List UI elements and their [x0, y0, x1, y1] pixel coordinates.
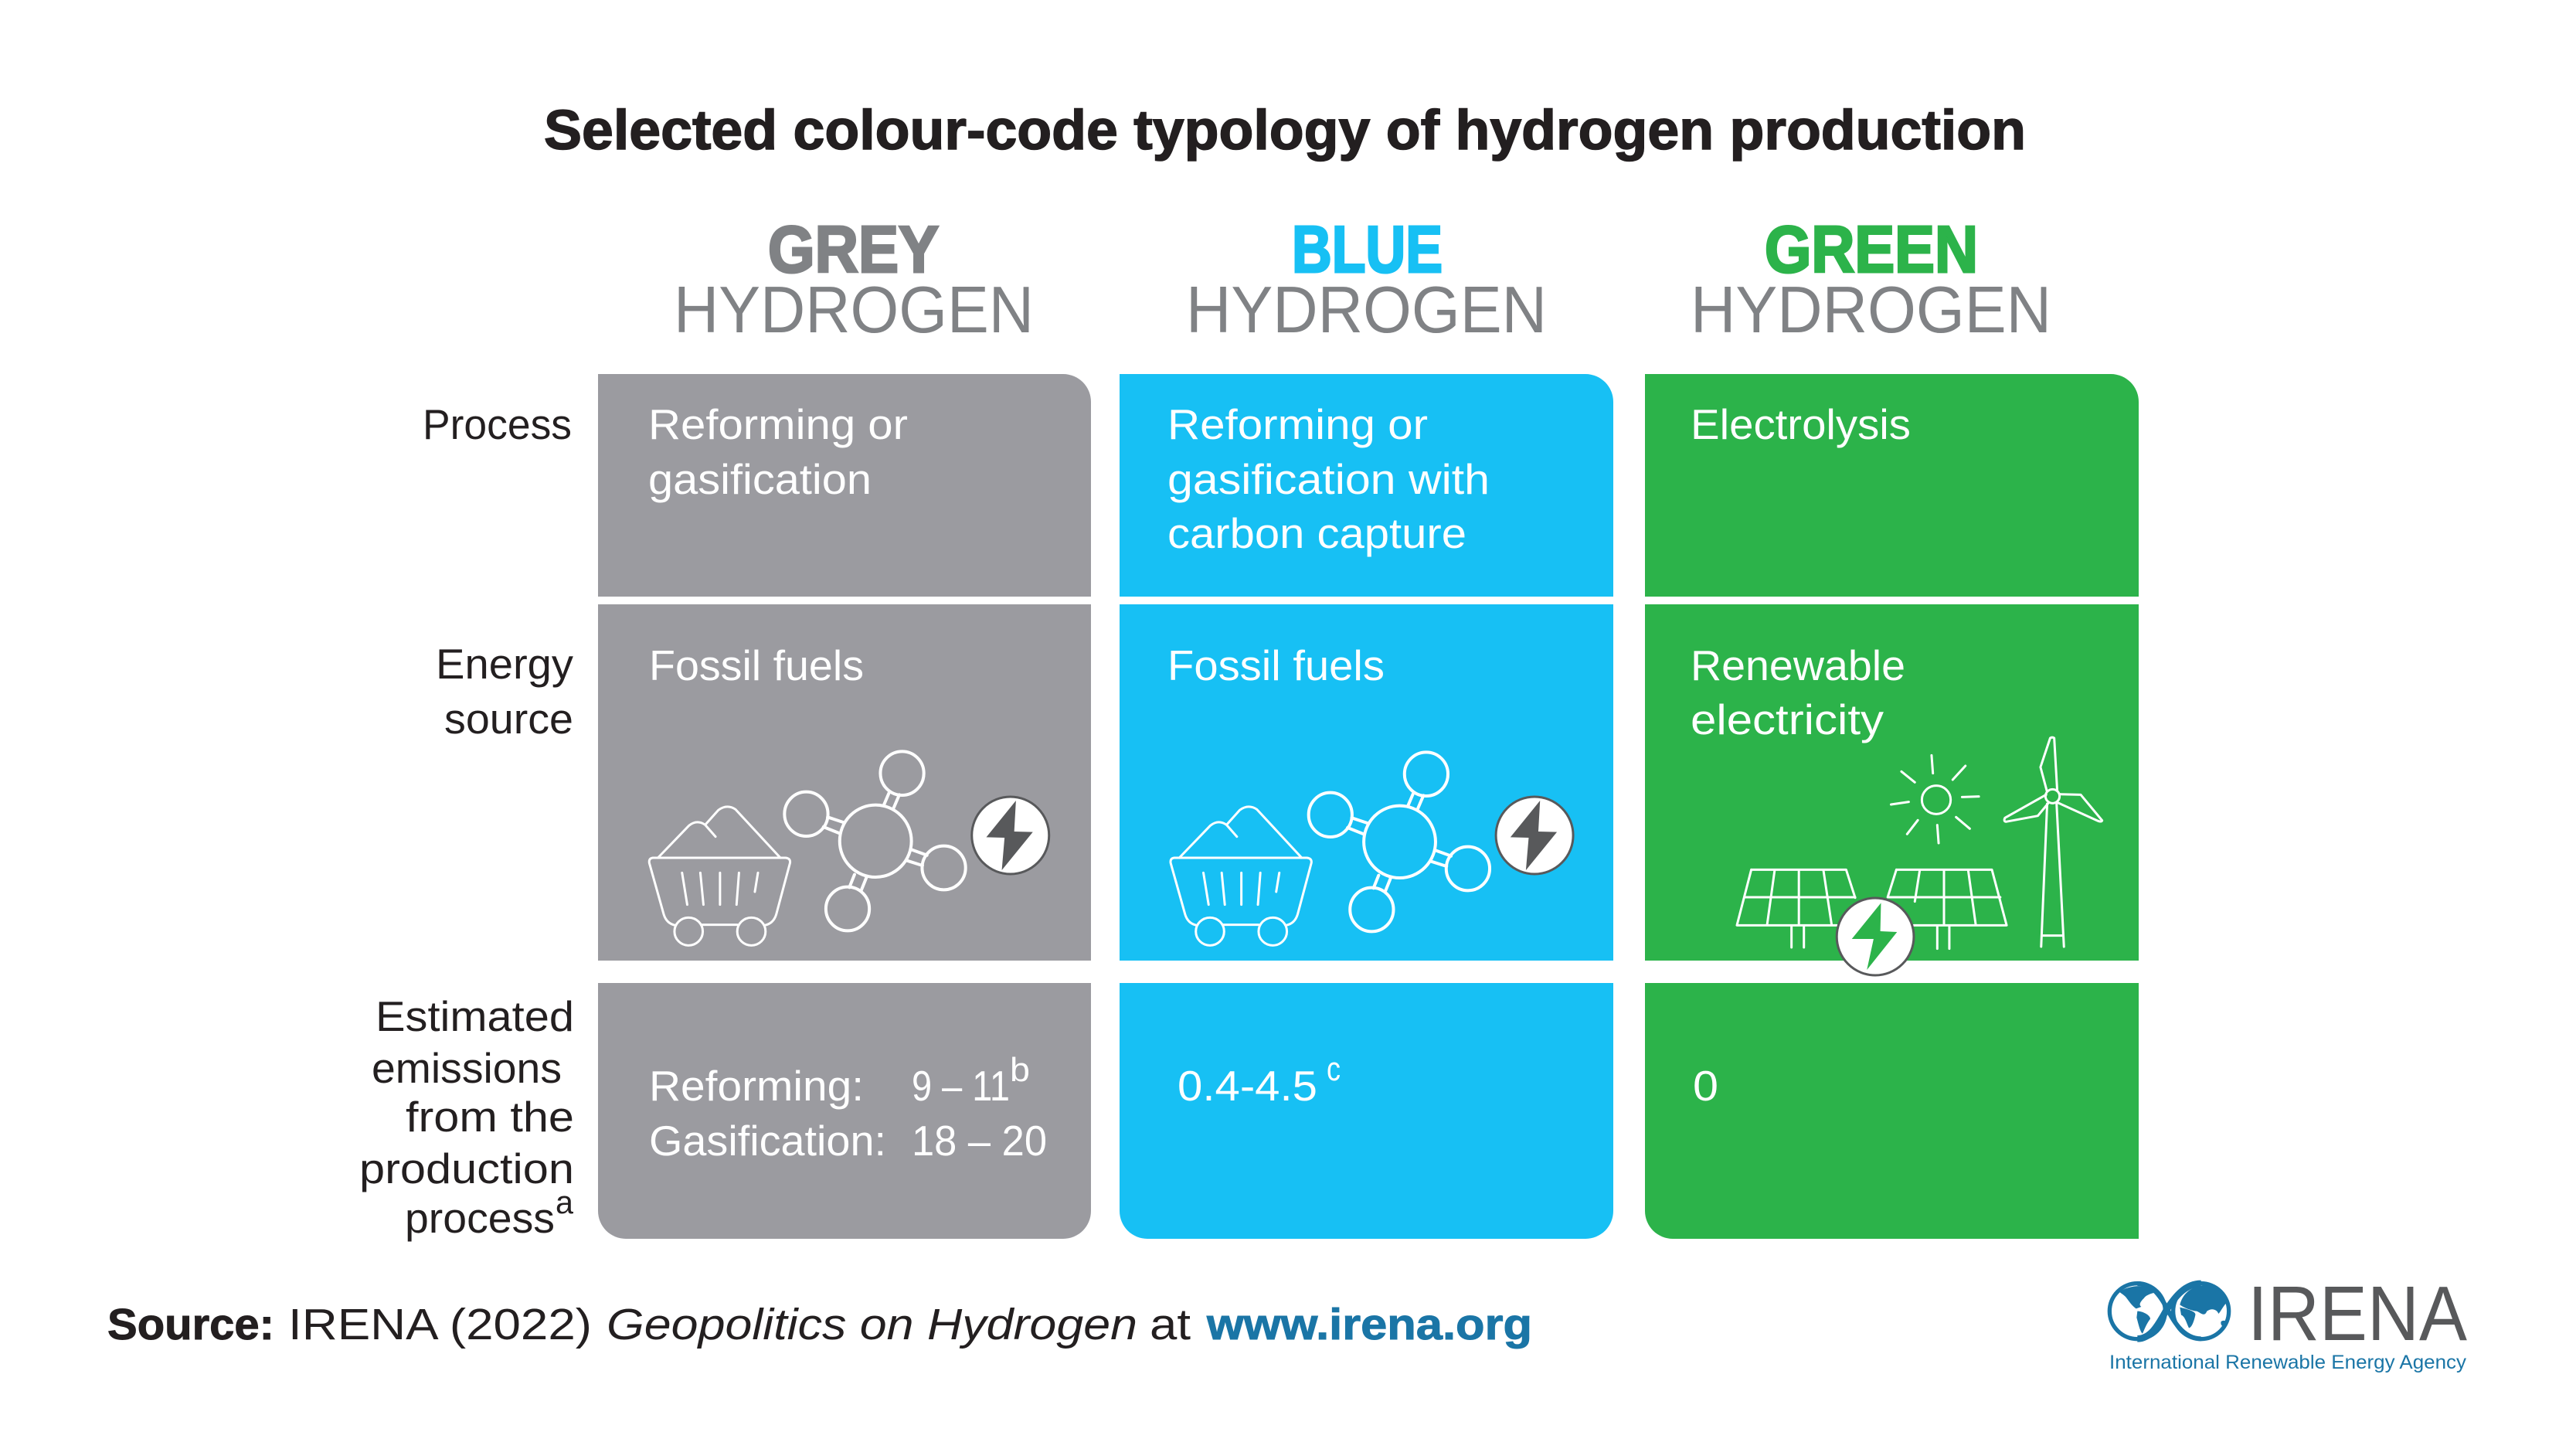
panel: blue column [1120, 374, 1613, 1239]
heading: green hydrogen [1691, 213, 2051, 347]
heading: grey hydrogen: GREY [768, 213, 939, 287]
heading: grey hydrogen: HYDROGEN [674, 274, 1034, 347]
logo: IRENA [2109, 1270, 2467, 1373]
power badge [1837, 898, 1914, 975]
green energy source cell [1645, 604, 2139, 961]
icon: coal cart, molecule and power badge (blue) [1171, 752, 1573, 945]
green process cell [1645, 374, 2139, 597]
label: estimated emissions: from the [406, 1093, 574, 1141]
blue process text [1167, 400, 1490, 557]
source line: IRENA (2022) [288, 1300, 592, 1349]
coal cart [1171, 807, 1311, 945]
green process text: Electrolysis [1691, 400, 1911, 448]
title: Selected colour-code typology of hydrogen production [544, 100, 2026, 162]
blue emissions value [1178, 1050, 1341, 1110]
logo tagline: International Renewable Energy Agency [2109, 1352, 2467, 1373]
blue process text: carbon capture [1167, 509, 1466, 557]
solar panel left [1737, 869, 1855, 947]
row labels [359, 400, 574, 1242]
label: estimated emissions: production [359, 1145, 574, 1192]
grey emissions values: b [1010, 1051, 1030, 1089]
blue process text: Reforming or [1167, 400, 1428, 448]
molecule [784, 751, 966, 930]
heading: blue hydrogen [1186, 213, 1547, 347]
wind turbine [2004, 737, 2102, 947]
label: estimated emissions: a [556, 1184, 574, 1220]
heading: grey hydrogen [674, 213, 1034, 347]
panel: green column [1645, 374, 2139, 1239]
heading: blue hydrogen: HYDROGEN [1186, 274, 1547, 347]
coal cart [649, 807, 790, 945]
label: estimated emissions: process [405, 1194, 555, 1242]
green emissions cell [1645, 983, 2139, 1239]
grey emissions values: Reforming: [649, 1062, 864, 1110]
logo wordmark: IRENA [2248, 1270, 2467, 1357]
icon: solar panels, sun, wind turbine and power badge [1737, 737, 2102, 975]
grey energy text: Fossil fuels [649, 641, 864, 689]
grey process cell [598, 374, 1091, 597]
blue emissions value: c [1327, 1050, 1341, 1088]
blue emissions value: 0.4-4.5 [1178, 1062, 1317, 1110]
heading: green hydrogen: HYDROGEN [1691, 274, 2051, 347]
source line: Geopolitics on Hydrogen [607, 1300, 1137, 1349]
green emissions value: 0 [1693, 1062, 1718, 1110]
blue process text: gasification with [1167, 455, 1490, 503]
source line: www.irena.org [1206, 1300, 1532, 1349]
heading: blue hydrogen: BLUE [1292, 213, 1443, 287]
molecule [1309, 752, 1490, 931]
green energy text: Renewable [1691, 641, 1905, 689]
label: process: Process [423, 400, 572, 448]
grey emissions values [649, 1051, 1047, 1165]
grey emissions values: 18 – 20 [912, 1117, 1047, 1165]
grey process text [648, 400, 908, 503]
blue process cell [1120, 374, 1613, 597]
panel: grey column [598, 374, 1091, 1239]
label: energy source [436, 640, 574, 743]
sun [1891, 755, 1979, 843]
heading: green hydrogen: GREEN [1765, 213, 1978, 287]
blue energy text: Fossil fuels [1167, 641, 1385, 689]
green energy text: electricity [1691, 696, 1884, 743]
grey emissions values: 9 – 11 [912, 1062, 1010, 1110]
solar panel right [1888, 869, 2007, 949]
grey emissions values: Gasification: [649, 1117, 886, 1165]
grey process text: gasification [648, 455, 872, 503]
icon: coal cart, molecule and power badge (grey) [649, 751, 1049, 945]
blue emissions cell [1120, 983, 1613, 1239]
label: estimated emissions: Estimated [376, 992, 574, 1040]
logo emblem: infinity globes [2109, 1284, 2229, 1339]
grey emissions cell [598, 983, 1091, 1239]
power badge [972, 797, 1049, 874]
label: energy source: Energy [436, 640, 574, 688]
label: estimated emissions: emissions [372, 1044, 562, 1092]
grey process text: Reforming or [648, 400, 908, 448]
blue energy source cell [1120, 604, 1613, 961]
grey energy source cell [598, 604, 1091, 961]
power badge [1496, 797, 1573, 874]
source line: at [1150, 1300, 1191, 1349]
source line: Source: [107, 1300, 274, 1349]
label: energy source: source [444, 695, 573, 743]
label: estimated emissions [359, 992, 574, 1242]
green energy text [1691, 641, 1905, 743]
